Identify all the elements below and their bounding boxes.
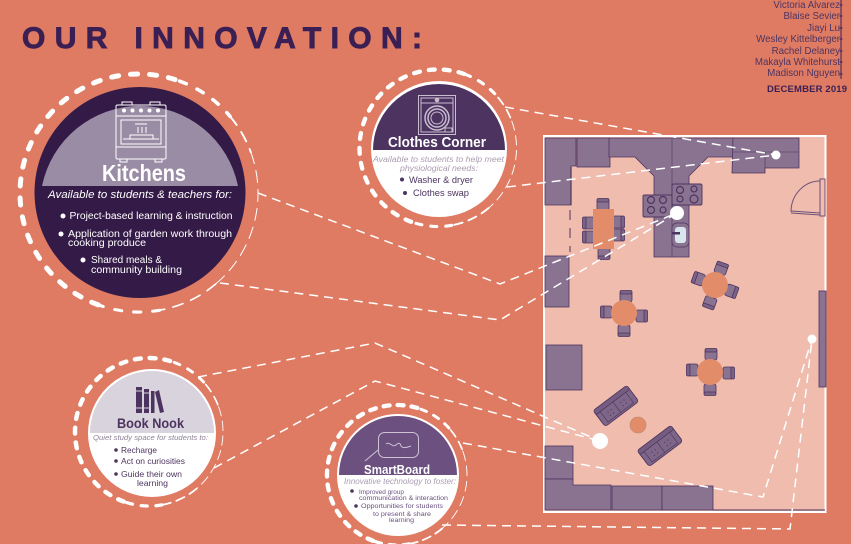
lounge sofas	[593, 385, 683, 467]
door	[791, 179, 825, 216]
bullet list: Improved group	[359, 489, 404, 496]
team member names: Makayla Whitehurst	[755, 57, 840, 68]
book nook connectors	[198, 343, 600, 468]
bullet list: Application of garden work through	[68, 229, 232, 240]
clothes corner connectors	[505, 107, 776, 187]
dashed ring	[20, 74, 258, 312]
team member names: Wesley Kittelberger	[756, 34, 841, 45]
title: OUR INNOVATION:	[22, 22, 422, 55]
circle	[337, 414, 459, 536]
bullet list: community building	[91, 265, 182, 276]
header band	[42, 106, 238, 186]
dining table with chairs	[582, 198, 624, 260]
team member names: Victoria Alvarez	[773, 0, 840, 11]
bullet list	[58, 211, 232, 276]
circle	[88, 369, 216, 497]
partition	[569, 210, 571, 252]
smartboard connectors	[442, 339, 812, 529]
bullet list: learning	[389, 517, 414, 524]
storage and counters	[545, 291, 826, 510]
dashed ring	[327, 405, 467, 544]
heading: Kitchens	[102, 160, 186, 186]
subheading: physiological needs:	[399, 163, 479, 173]
team member names: Jiayi Lu	[807, 23, 840, 34]
kitchen cabinets	[545, 138, 799, 307]
subheading: Innovative technology to foster:	[344, 477, 456, 486]
circle	[34, 87, 246, 298]
icon: oven	[116, 102, 166, 162]
heading: SmartBoard	[364, 462, 430, 477]
circle	[371, 81, 507, 217]
team member names: Blaise Sevier	[783, 11, 841, 22]
team member names: Madison Nguyen	[767, 68, 840, 79]
bullet list: Washer & dryer	[409, 175, 473, 186]
bullet list: to present & share	[373, 511, 431, 518]
dashed ring	[360, 69, 517, 227]
room	[544, 136, 826, 512]
subheading: Available to students to help meet	[372, 154, 505, 164]
icon: books	[136, 387, 164, 413]
icon: washer	[418, 96, 456, 134]
bullet list: Recharge	[121, 445, 157, 455]
bullet list: Clothes swap	[413, 188, 469, 199]
dashed ring	[75, 358, 223, 506]
header band	[339, 416, 457, 475]
subheading: Available to students & teachers for:	[47, 189, 232, 201]
stoves	[643, 184, 702, 217]
header band	[373, 84, 505, 150]
heading: Clothes Corner	[388, 135, 486, 151]
bullet list: learning	[137, 478, 168, 488]
bullet list: Shared meals &	[91, 255, 162, 266]
panel: smartboard	[327, 405, 467, 544]
panel: book nook	[75, 358, 223, 506]
floor plan	[544, 136, 826, 512]
round table 1	[691, 261, 739, 310]
location markers	[592, 150, 816, 449]
header band	[90, 371, 214, 433]
round table 2	[600, 290, 648, 336]
panel: kitchens	[20, 74, 258, 312]
sink	[672, 223, 689, 247]
bullet list: cooking produce	[68, 238, 146, 249]
team member names	[755, 0, 842, 79]
bullet list: communication & interaction	[359, 495, 448, 502]
heading: Book Nook	[117, 415, 184, 431]
bullet list: Guide their own	[121, 469, 182, 479]
round table 3	[686, 348, 734, 396]
bullet list: Act on curiosities	[121, 456, 185, 466]
panel: clothes corner	[360, 69, 517, 227]
bullet list: Project-based learning & instruction	[70, 211, 232, 222]
date: DECEMBER 2019	[767, 84, 847, 95]
connector lines	[198, 107, 812, 529]
bullet list	[114, 445, 185, 488]
bullet list	[350, 489, 448, 524]
kitchen connectors	[220, 193, 677, 320]
bullet list: Opportunities for students	[361, 503, 444, 510]
icon: smartboard	[365, 432, 418, 461]
subheading: Quiet study space for students to:	[93, 433, 208, 442]
bullet list	[400, 175, 473, 199]
team member names: Rachel Delaney	[772, 46, 840, 57]
